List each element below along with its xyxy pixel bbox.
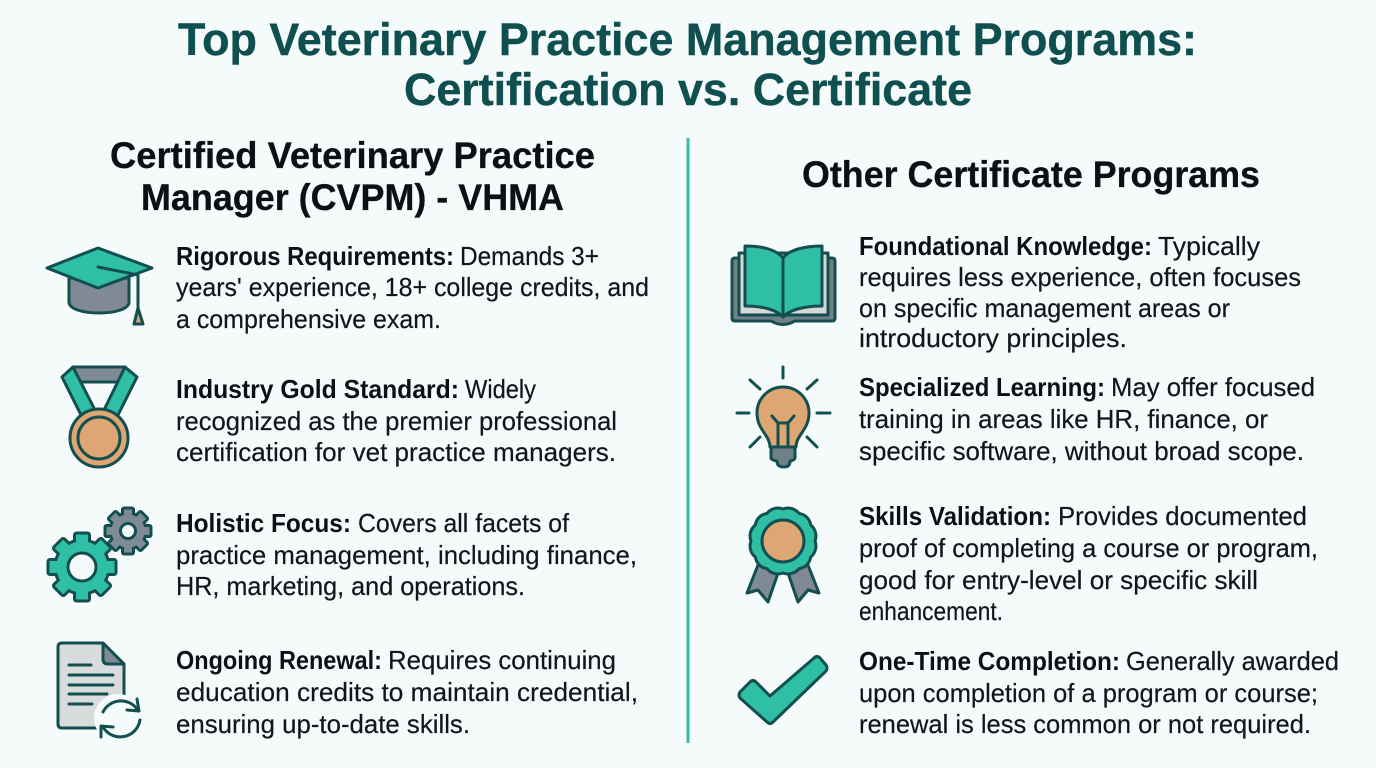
icon: gears <box>48 508 151 601</box>
text: specialized learning: training in areas like HR, finance, or <box>859 404 1268 434</box>
text: specialized learning: specific software, without broad scope. <box>859 436 1304 466</box>
text: rigorous requirements <box>176 241 649 334</box>
text: industry gold standard: Industry Gold Standard: <box>176 374 459 404</box>
panel: other certificates <box>732 154 1339 739</box>
title: Top Veterinary Practice Management Programs: <box>178 14 1197 65</box>
text: ongoing renewal: ensuring up-to-date skills. <box>176 709 470 739</box>
text: skills validation <box>859 501 1318 626</box>
icon: light bulb <box>737 367 830 467</box>
text: ongoing renewal: Requires continuing <box>388 645 616 675</box>
text: holistic focus: HR, marketing, and operations. <box>176 571 525 601</box>
text: foundational knowledge: introductory principles. <box>859 323 1127 353</box>
icon: graduation cap <box>47 248 152 324</box>
text: holistic focus <box>176 508 637 601</box>
text: specialized learning <box>859 372 1315 466</box>
heading: CVPM: Manager (CVPM) - VHMA <box>141 177 564 218</box>
icon: open book <box>732 246 835 324</box>
text: one-time completion <box>859 646 1339 739</box>
text: rigorous requirements: a comprehensive exam. <box>176 304 441 334</box>
text: ongoing renewal: education credits to maintain credential, <box>176 677 638 707</box>
text: holistic focus: practice management, including finance, <box>176 540 637 570</box>
text: industry gold standard: certification for vet practice managers. <box>176 437 616 467</box>
text: holistic focus: Holistic Focus: <box>176 508 351 538</box>
icon: check mark <box>739 656 827 724</box>
text: industry gold standard: Widely <box>465 374 536 404</box>
text: foundational knowledge: Foundational Knowledge: <box>859 231 1152 261</box>
text: foundational knowledge: requires less experience, often focuses <box>859 262 1301 292</box>
text: one-time completion: renewal is less common or not required. <box>859 709 1311 739</box>
text: rigorous requirements: Demands 3+ <box>460 241 599 271</box>
text: one-time completion: Generally awarded <box>1126 646 1339 676</box>
heading: CVPM: Certified Veterinary Practice <box>110 135 595 176</box>
text: skills validation: good for entry-level or specific skill <box>859 565 1258 595</box>
icon: document renewal <box>58 643 142 742</box>
text: industry gold standard: recognized as the premier professional <box>176 406 617 436</box>
text: foundational knowledge: on specific management areas or <box>859 293 1230 323</box>
icon: rosette <box>747 508 819 602</box>
text: ongoing renewal: Ongoing Renewal: <box>176 645 382 675</box>
text: foundational knowledge <box>859 231 1301 353</box>
heading: CVPM <box>110 135 595 218</box>
text: specialized learning: May offer focused <box>1111 372 1315 402</box>
text: one-time completion: One-Time Completion: <box>859 646 1120 676</box>
text: skills validation: proof of completing a course or program, <box>859 533 1318 563</box>
text: rigorous requirements: Rigorous Requirements: <box>176 241 454 271</box>
text: ongoing renewal <box>176 645 638 739</box>
text: skills validation: enhancement. <box>859 596 1003 626</box>
panel: CVPM <box>47 135 649 742</box>
text: specialized learning: Specialized Learning: <box>859 372 1105 402</box>
text: rigorous requirements: years' experience, 18+ college credits, and <box>176 272 649 302</box>
heading: other certificate programs: Other Certificate Programs <box>802 154 1260 195</box>
text: skills validation: Skills Validation: <box>859 501 1051 531</box>
text: skills validation: Provides documented <box>1058 501 1307 531</box>
text: foundational knowledge: Typically <box>1158 231 1260 261</box>
text: one-time completion: upon completion of a program or course; <box>859 678 1318 708</box>
icon: medal <box>62 367 137 467</box>
title: Certification vs. Certificate <box>404 64 972 115</box>
text: holistic focus: Covers all facets of <box>358 508 570 538</box>
text: industry gold standard <box>176 374 617 467</box>
title <box>178 14 1197 115</box>
